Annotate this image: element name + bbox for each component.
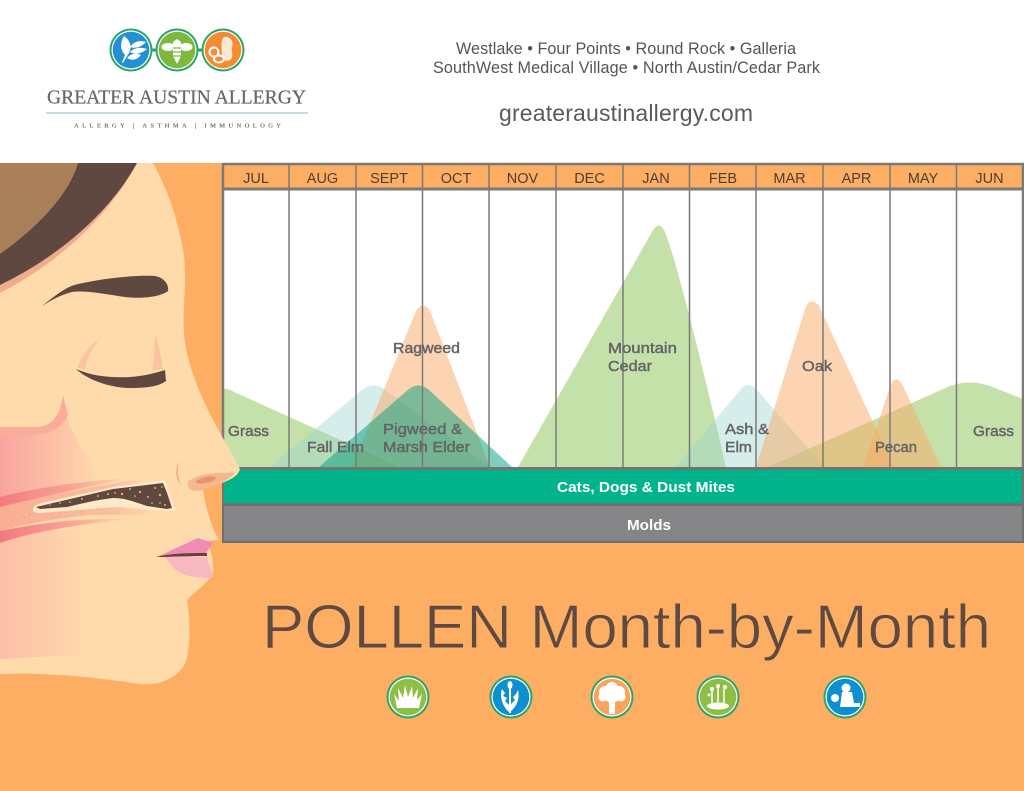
lower lip [165, 557, 213, 578]
chart: pollen calendar [222, 163, 1024, 543]
area: fall elm [270, 386, 490, 467]
icon: bee [156, 28, 198, 72]
icon: flowers [696, 676, 740, 718]
logo tagline: ALLERGY | ASTHMA | IMMUNOLOGY [74, 122, 281, 130]
chart labels [228, 340, 1014, 456]
icon: leaf [110, 28, 152, 72]
upper lip [157, 538, 213, 557]
month labels: AUG [307, 171, 338, 187]
eyelid creases [77, 333, 163, 370]
passage dots [5, 508, 99, 526]
face [0, 163, 240, 684]
month labels: FEB [709, 171, 737, 187]
month labels: JUN [975, 171, 1004, 187]
month labels: APR [842, 171, 871, 187]
month labels: NOV [507, 171, 539, 187]
month labels [243, 171, 1004, 187]
month labels: JUL [243, 171, 269, 187]
hair dark [0, 163, 137, 285]
logo name: GREATER AUSTIN ALLERGY [47, 86, 306, 108]
chart labels: Oak [802, 358, 833, 375]
sinus lower [0, 530, 85, 659]
nasal passage [0, 480, 165, 531]
chart labels: Elm [725, 439, 752, 456]
area: oak [756, 302, 894, 467]
locations text: SouthWest Medical Village • North Austin/Cedar Park [433, 59, 821, 77]
locations text: Westlake • Four Points • Round Rock • Galleria [456, 40, 796, 58]
mouth line [156, 553, 207, 557]
bar: molds: Molds [627, 518, 671, 534]
chart labels: Grass [973, 423, 1014, 440]
chart labels: Pecan [875, 439, 917, 456]
icon: pets and dust mites [824, 676, 866, 718]
chart area [223, 190, 1023, 467]
logo: Greater Austin Allergy [46, 28, 308, 130]
month labels: OCT [441, 171, 471, 187]
chart labels: Ash & [725, 421, 769, 438]
bar: cats, dogs and dust mites: Cats, Dogs & Dust Mites [557, 480, 735, 496]
eyebrow [42, 276, 168, 306]
website: greateraustinallergy.com [499, 100, 753, 126]
month labels: JAN [642, 171, 670, 187]
month labels: MAR [773, 171, 806, 187]
chart labels: Grass [228, 423, 269, 440]
nasal cream outline [33, 480, 176, 513]
area: ragweed [352, 306, 490, 467]
locations text [433, 40, 821, 77]
bar: molds [222, 504, 1024, 543]
month labels: MAY [908, 171, 938, 187]
sinus upper [0, 415, 102, 500]
area: grass left [224, 389, 400, 467]
nasal passage red upper [0, 478, 135, 508]
icon: weed [490, 676, 532, 718]
area: ash and elm [676, 385, 825, 467]
nose crease [176, 461, 181, 485]
illustration: face profile [0, 163, 240, 684]
hair light [0, 163, 78, 254]
chart labels: Marsh Elder [383, 439, 470, 456]
icon: grass [386, 676, 430, 718]
month header [222, 164, 1024, 188]
chart labels: Cedar [608, 358, 652, 375]
icon: peanut [202, 28, 244, 72]
bar: cats, dogs and dust mites [222, 467, 1024, 505]
hair edge [0, 163, 137, 293]
month labels: SEPT [370, 171, 408, 187]
chart labels: Fall Elm [307, 439, 364, 456]
chart labels: Pigweed & [383, 421, 462, 438]
chart labels: Ragweed [393, 340, 460, 357]
area: pigweed and marsh elder [319, 386, 512, 467]
title: POLLEN Month-by-Month [262, 593, 991, 662]
area: grass right [768, 382, 1023, 467]
area: pecan [863, 380, 941, 467]
icon: tree [590, 676, 634, 718]
chart labels: Mountain [608, 340, 677, 357]
nasal passage red lower [0, 519, 130, 543]
nasal congestion [36, 483, 172, 509]
closed eye [76, 369, 166, 388]
area: mountain cedar [518, 226, 726, 467]
month labels: DEC [574, 171, 605, 187]
nostril [188, 473, 235, 491]
sinus band [0, 395, 68, 438]
